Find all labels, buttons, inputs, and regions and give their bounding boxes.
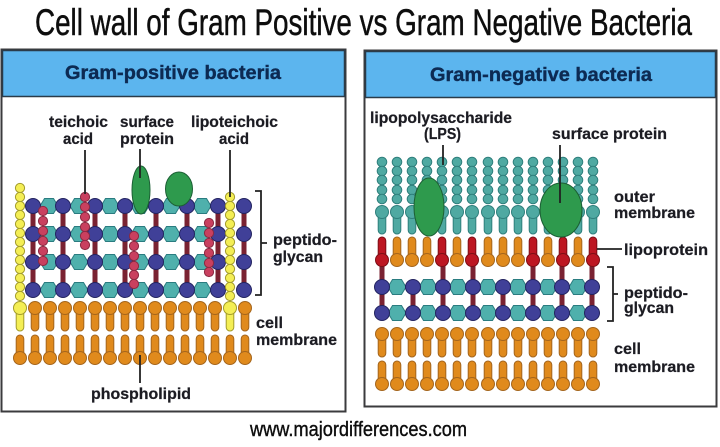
labels: lipopolysaccharide bbox=[370, 110, 512, 127]
labels: teichoic bbox=[49, 114, 108, 131]
header band bbox=[366, 52, 716, 98]
lipoteichoic acid chains bbox=[14, 183, 236, 331]
labels bbox=[370, 110, 708, 376]
label lines bbox=[85, 149, 267, 383]
labels: peptido- bbox=[624, 285, 688, 302]
labels: membrane bbox=[256, 332, 337, 349]
panel frame bbox=[2, 50, 346, 412]
cell membrane bilayer bbox=[376, 328, 600, 390]
labels: peptido- bbox=[273, 232, 337, 249]
surface proteins bbox=[132, 166, 192, 214]
website footer: www.majordifferences.com bbox=[249, 419, 467, 441]
peptidoglycan layer bbox=[374, 260, 600, 320]
labels: membrane bbox=[614, 359, 695, 376]
labels: lipoprotein bbox=[624, 242, 708, 259]
labels: cell bbox=[256, 315, 283, 332]
lipoprotein row bbox=[376, 237, 600, 266]
panel frame bbox=[364, 50, 716, 406]
phospholipid bilayer bbox=[14, 302, 252, 364]
labels: acid bbox=[219, 131, 249, 148]
heading: Gram-positive bacteria bbox=[65, 62, 281, 84]
peptidoglycan layer bbox=[26, 198, 252, 298]
labels: surface protein bbox=[552, 126, 667, 143]
panel: gram-negative bacteria bbox=[364, 50, 716, 406]
outer membrane LPS bbox=[376, 157, 600, 234]
panel: gram-positive bacteria bbox=[2, 50, 346, 412]
labels: glycan bbox=[273, 249, 323, 266]
labels: surface bbox=[120, 114, 174, 131]
labels: membrane bbox=[614, 205, 695, 222]
labels: cell bbox=[614, 341, 641, 358]
label lines bbox=[443, 145, 622, 321]
teichoic acid chains bbox=[38, 192, 214, 289]
labels: protein bbox=[120, 131, 174, 148]
labels: (LPS) bbox=[424, 126, 461, 143]
labels: glycan bbox=[624, 300, 674, 317]
header band bbox=[2, 50, 344, 96]
surface proteins bbox=[414, 178, 582, 237]
heading: Gram-negative bacteria bbox=[430, 64, 652, 86]
labels bbox=[49, 114, 337, 403]
labels: outer bbox=[614, 189, 655, 206]
labels: acid bbox=[63, 131, 93, 148]
labels: phospholipid bbox=[91, 386, 191, 403]
labels: lipoteichoic bbox=[191, 114, 278, 131]
